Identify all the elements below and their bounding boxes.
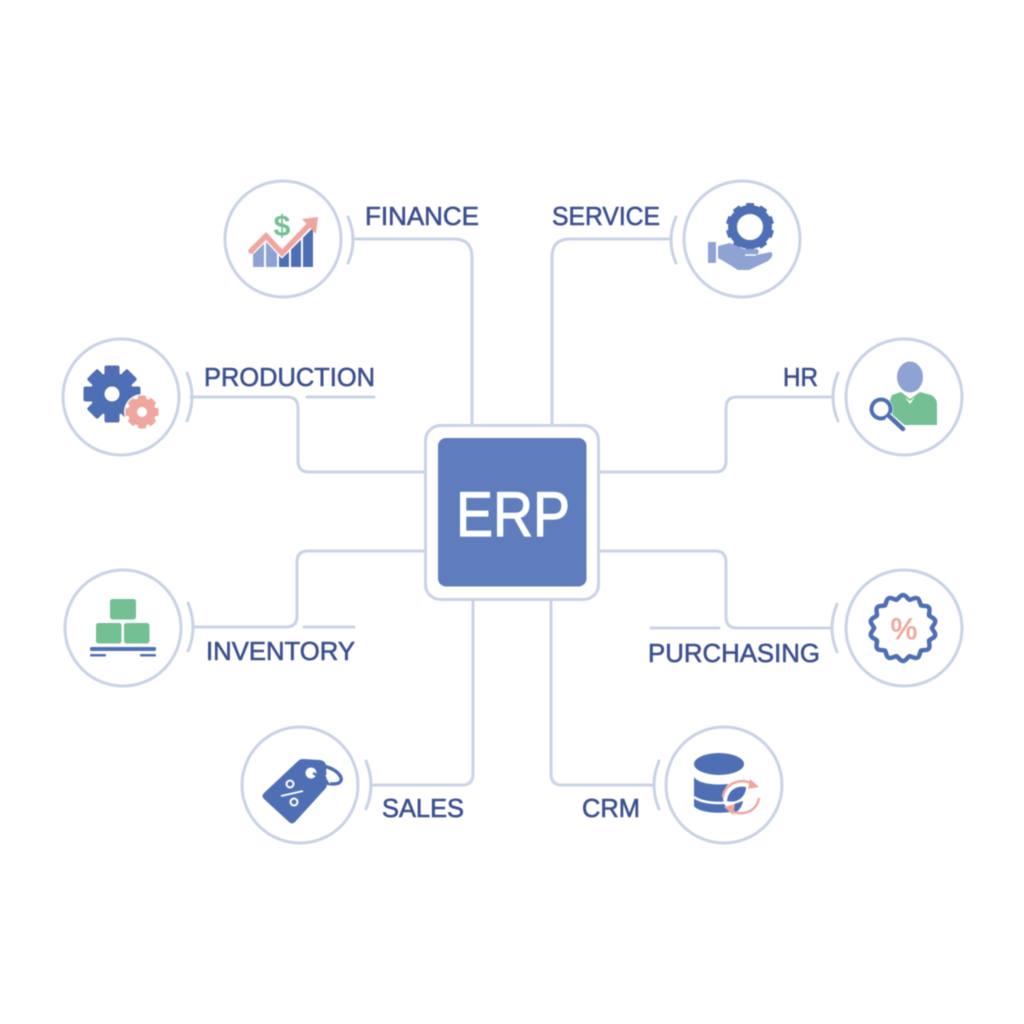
- panel: CRM: [582, 727, 782, 843]
- central ERP block: [426, 426, 598, 600]
- connector: service: [552, 217, 676, 425]
- connector: CRM: [551, 600, 659, 809]
- connector: finance: [348, 217, 472, 425]
- icon: finance chart: $: [274, 210, 291, 243]
- label: HR: HR: [783, 362, 818, 392]
- central ERP block: ERP: [456, 480, 570, 550]
- icon: gear on hand: [708, 203, 774, 270]
- panel: sales: [242, 727, 464, 843]
- label: finance: FINANCE: [365, 201, 479, 231]
- panel: service: [552, 181, 800, 297]
- label: CRM: CRM: [582, 793, 640, 823]
- label: sales: SALES: [382, 793, 464, 823]
- connector: purchasing: [600, 551, 837, 652]
- icon: percent badge: [869, 595, 937, 661]
- connector: sales: [366, 600, 473, 809]
- connector: HR: [600, 373, 838, 472]
- panel: purchasing: [648, 570, 962, 686]
- panel: HR: [783, 339, 962, 455]
- icon: finance chart: [251, 210, 318, 267]
- connector: production: [187, 373, 425, 472]
- panel: inventory: [65, 570, 355, 686]
- icon: percent badge: %: [891, 613, 917, 646]
- panel: finance: [225, 181, 479, 297]
- panel: production: [63, 339, 375, 455]
- label: purchasing: PURCHASING: [648, 638, 820, 668]
- icon: price tag: [262, 759, 344, 824]
- label: service: SERVICE: [552, 201, 660, 231]
- icon: database sync: [694, 753, 761, 816]
- label: production: PRODUCTION: [204, 362, 375, 392]
- icon: person with magnifier: [869, 362, 937, 429]
- label: inventory: INVENTORY: [206, 636, 355, 666]
- icon: stacked boxes on pallet: [90, 599, 156, 656]
- connector: inventory: [188, 551, 425, 651]
- icon: gears: [84, 366, 160, 430]
